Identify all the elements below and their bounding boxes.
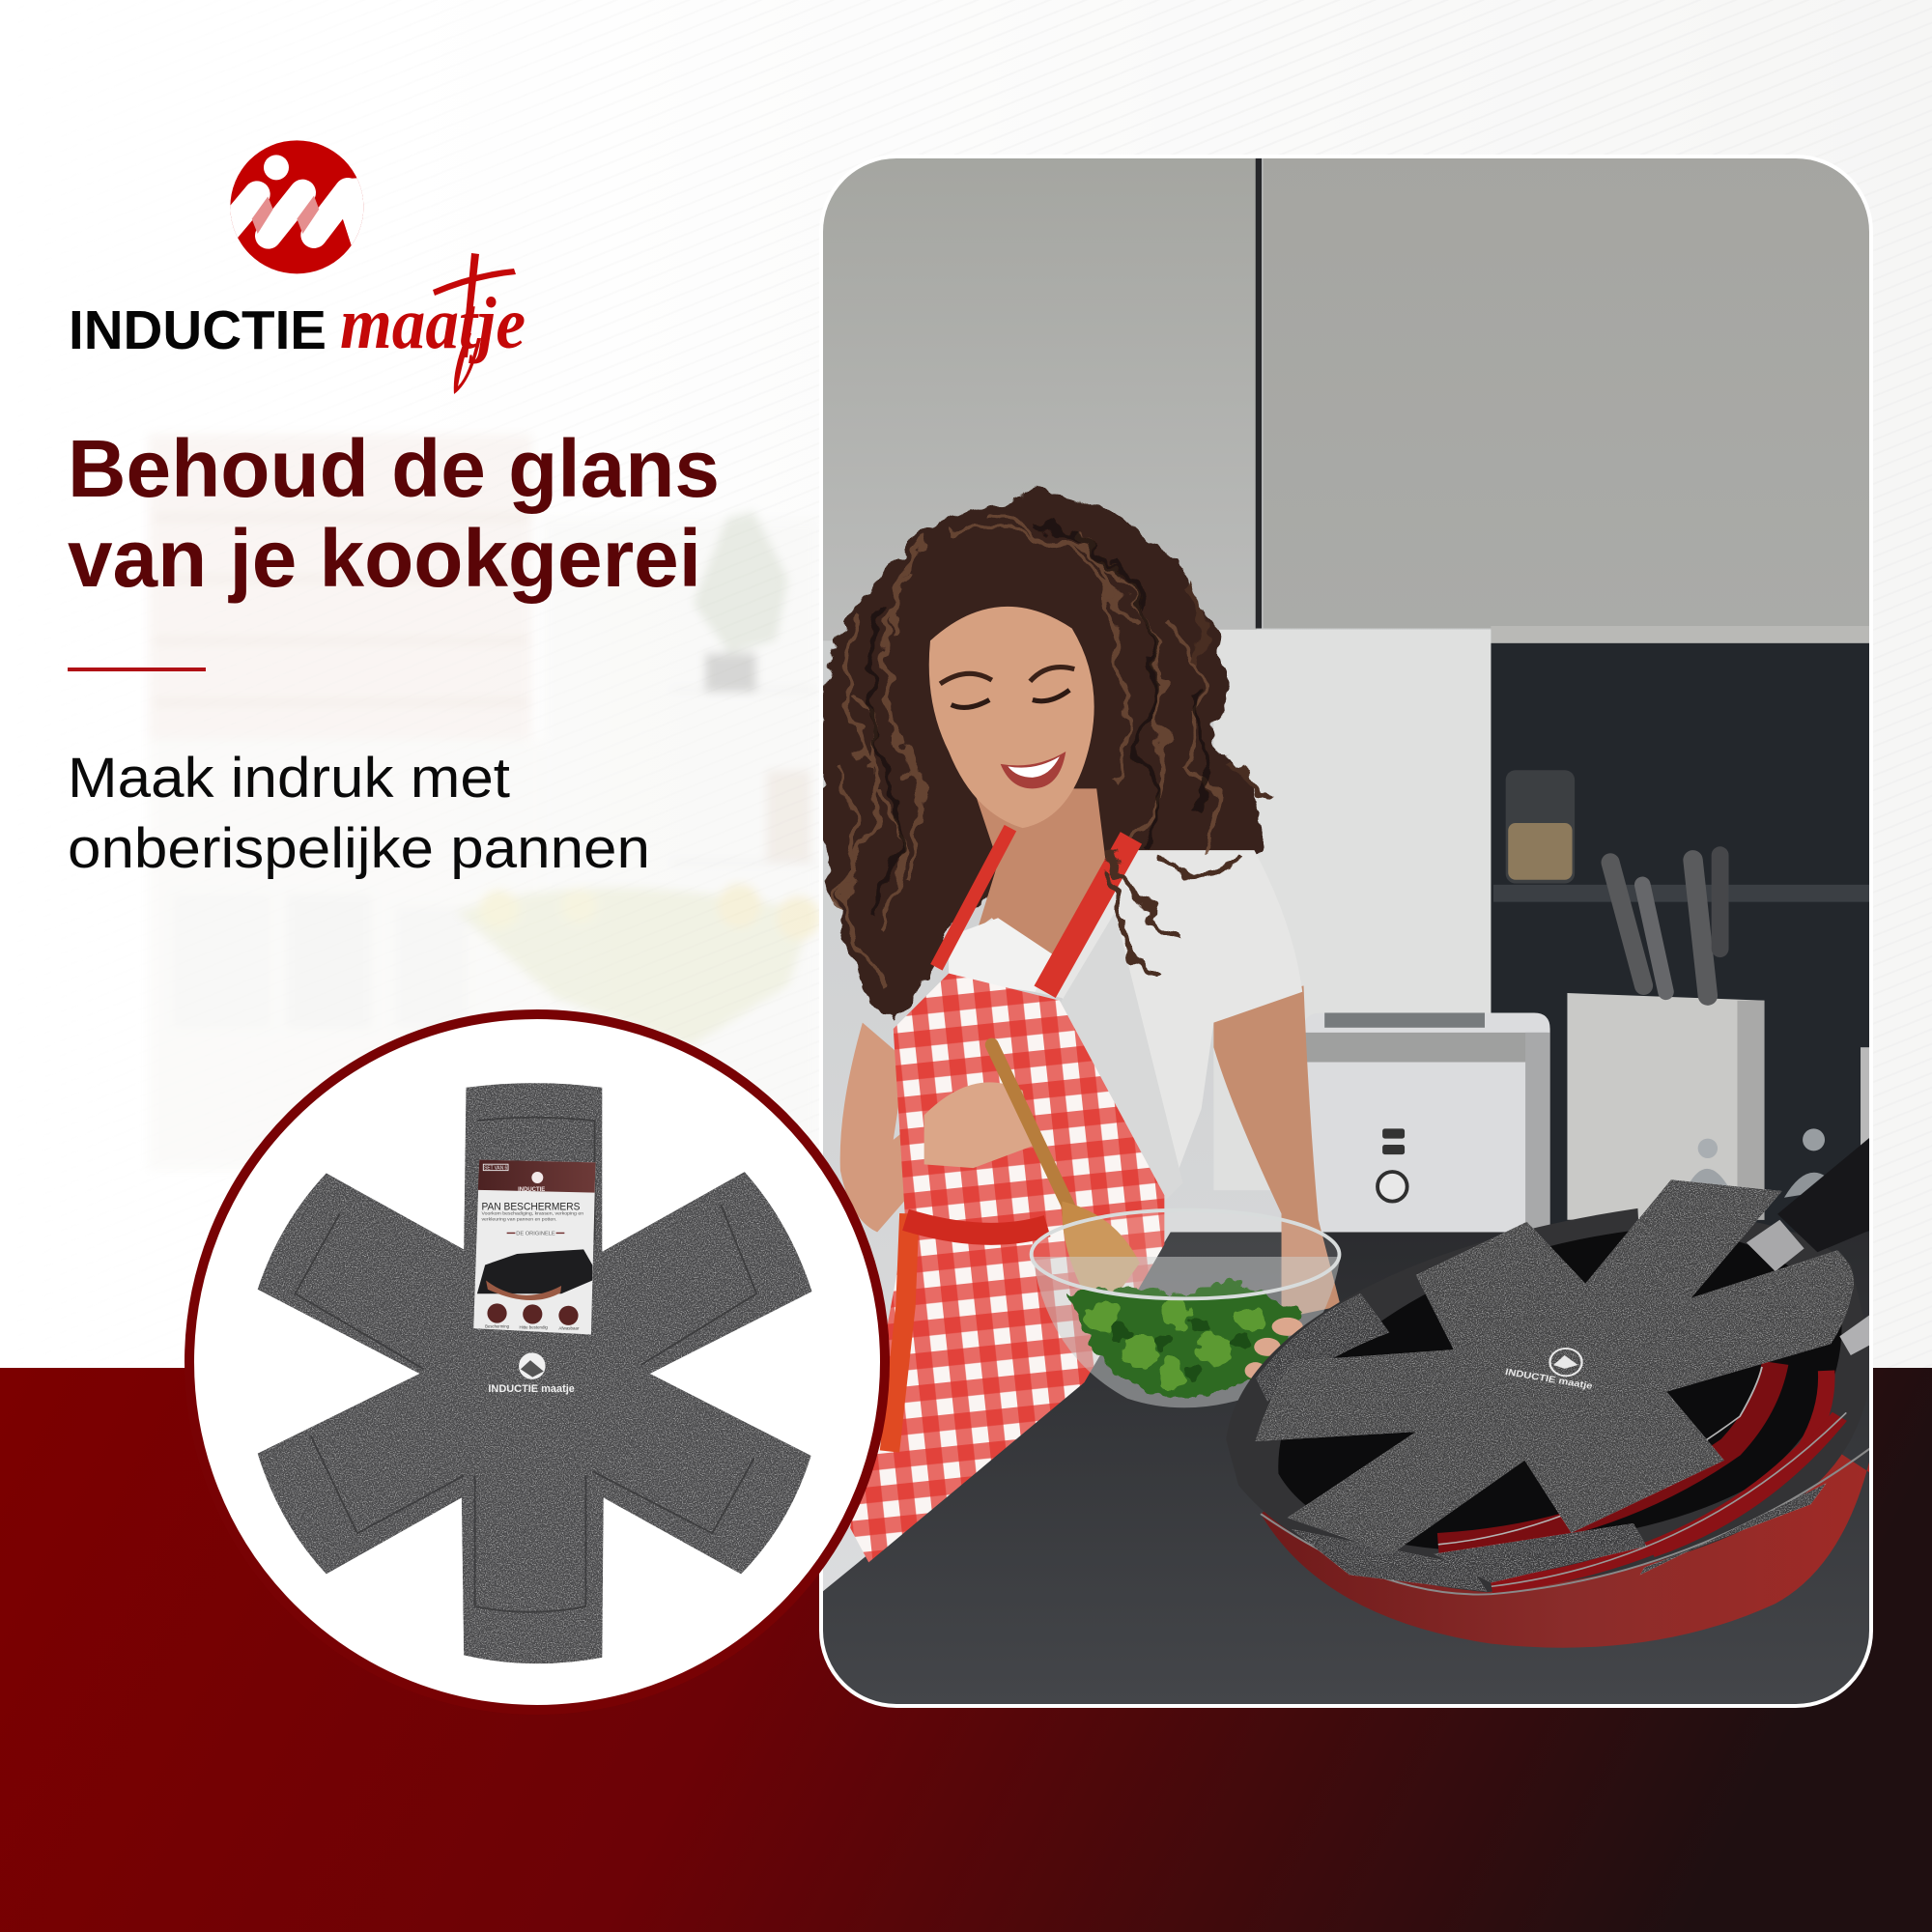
frying pans with felt protector [1226,1136,1877,1648]
face [929,607,1094,828]
product circle [189,1014,885,1710]
t-shirt [985,850,1302,1168]
toaster [1303,1012,1550,1233]
heading [68,423,720,604]
faint kitchen background scene [148,434,820,1171]
shelf with jar [1493,770,1875,902]
neck and chest [974,788,1109,961]
counter top [813,1233,1886,1725]
curls [838,511,1269,985]
panel: kitchen photo [813,148,1886,1725]
logo [69,140,526,394]
product tag: verkleuring van pannen en potten. [481,1217,557,1222]
wall [823,158,1869,1592]
felt liners [1226,1208,1873,1592]
hand on spoon [924,1082,1033,1168]
dark red gradient band [0,1368,1932,1932]
product tag [473,1160,595,1335]
icon: logo circle [222,140,370,273]
product tag: Bescherming [485,1324,510,1329]
fingers [1245,1318,1303,1403]
upper cabinets [813,148,1879,643]
subheading: Maak indruk met [68,747,510,810]
red pan [1261,1416,1877,1648]
star logo: INDUCTIE maatje [1504,1368,1594,1392]
wordmark: maatje [340,253,526,394]
felt star [1256,1179,1854,1554]
apron straps [890,828,1131,1452]
product tag: Hitte bestendig [520,1325,549,1330]
pan interior [1278,1229,1842,1550]
white fridge panel [1213,630,1491,1190]
arm left [840,1022,904,1233]
star logo [1504,1349,1594,1392]
backsplash [1491,643,1879,1235]
inner red pans [1261,1363,1872,1595]
felt lower segments [1257,1293,1827,1591]
wooden spoon [992,1045,1140,1306]
heading: van je kookgerei [68,513,701,604]
hair back [821,493,1261,1023]
heading: Behoud de glans [68,423,720,514]
salad [1069,1282,1301,1399]
apron [850,974,1164,1562]
glass bowl with salad [1032,1210,1341,1407]
pan handle [1747,1136,1872,1355]
knife block [1567,855,1765,1220]
subheading: onberispelijke pannen [68,817,650,880]
panel border [821,156,1871,1706]
star logo [488,1352,575,1395]
inner layer stitch lines [296,1118,756,1612]
woman [821,493,1341,1562]
felt protector star [258,1083,812,1663]
product tag: Voorkom beschadiging, krassen, verkoping en [481,1211,584,1216]
product tag: PAN BESCHERMERS [481,1202,580,1213]
smile and eyes [940,668,1074,788]
product tag: INDUCTIE [518,1187,545,1193]
page background [869,0,1932,1368]
product tag: SET VAN 6 [484,1166,507,1172]
arm right [1213,985,1341,1319]
wordmark: inductie: INDUCTIE [69,299,327,361]
subheading [68,747,650,880]
product tag: Afwasbaar [558,1325,580,1330]
wordmark: maatje: maatje [340,283,526,364]
divider [68,668,206,671]
product tag: DE ORIGINELE [516,1232,555,1237]
side appliance and glass lids [1688,1047,1879,1198]
star logo: INDUCTIE maatje [488,1383,575,1395]
